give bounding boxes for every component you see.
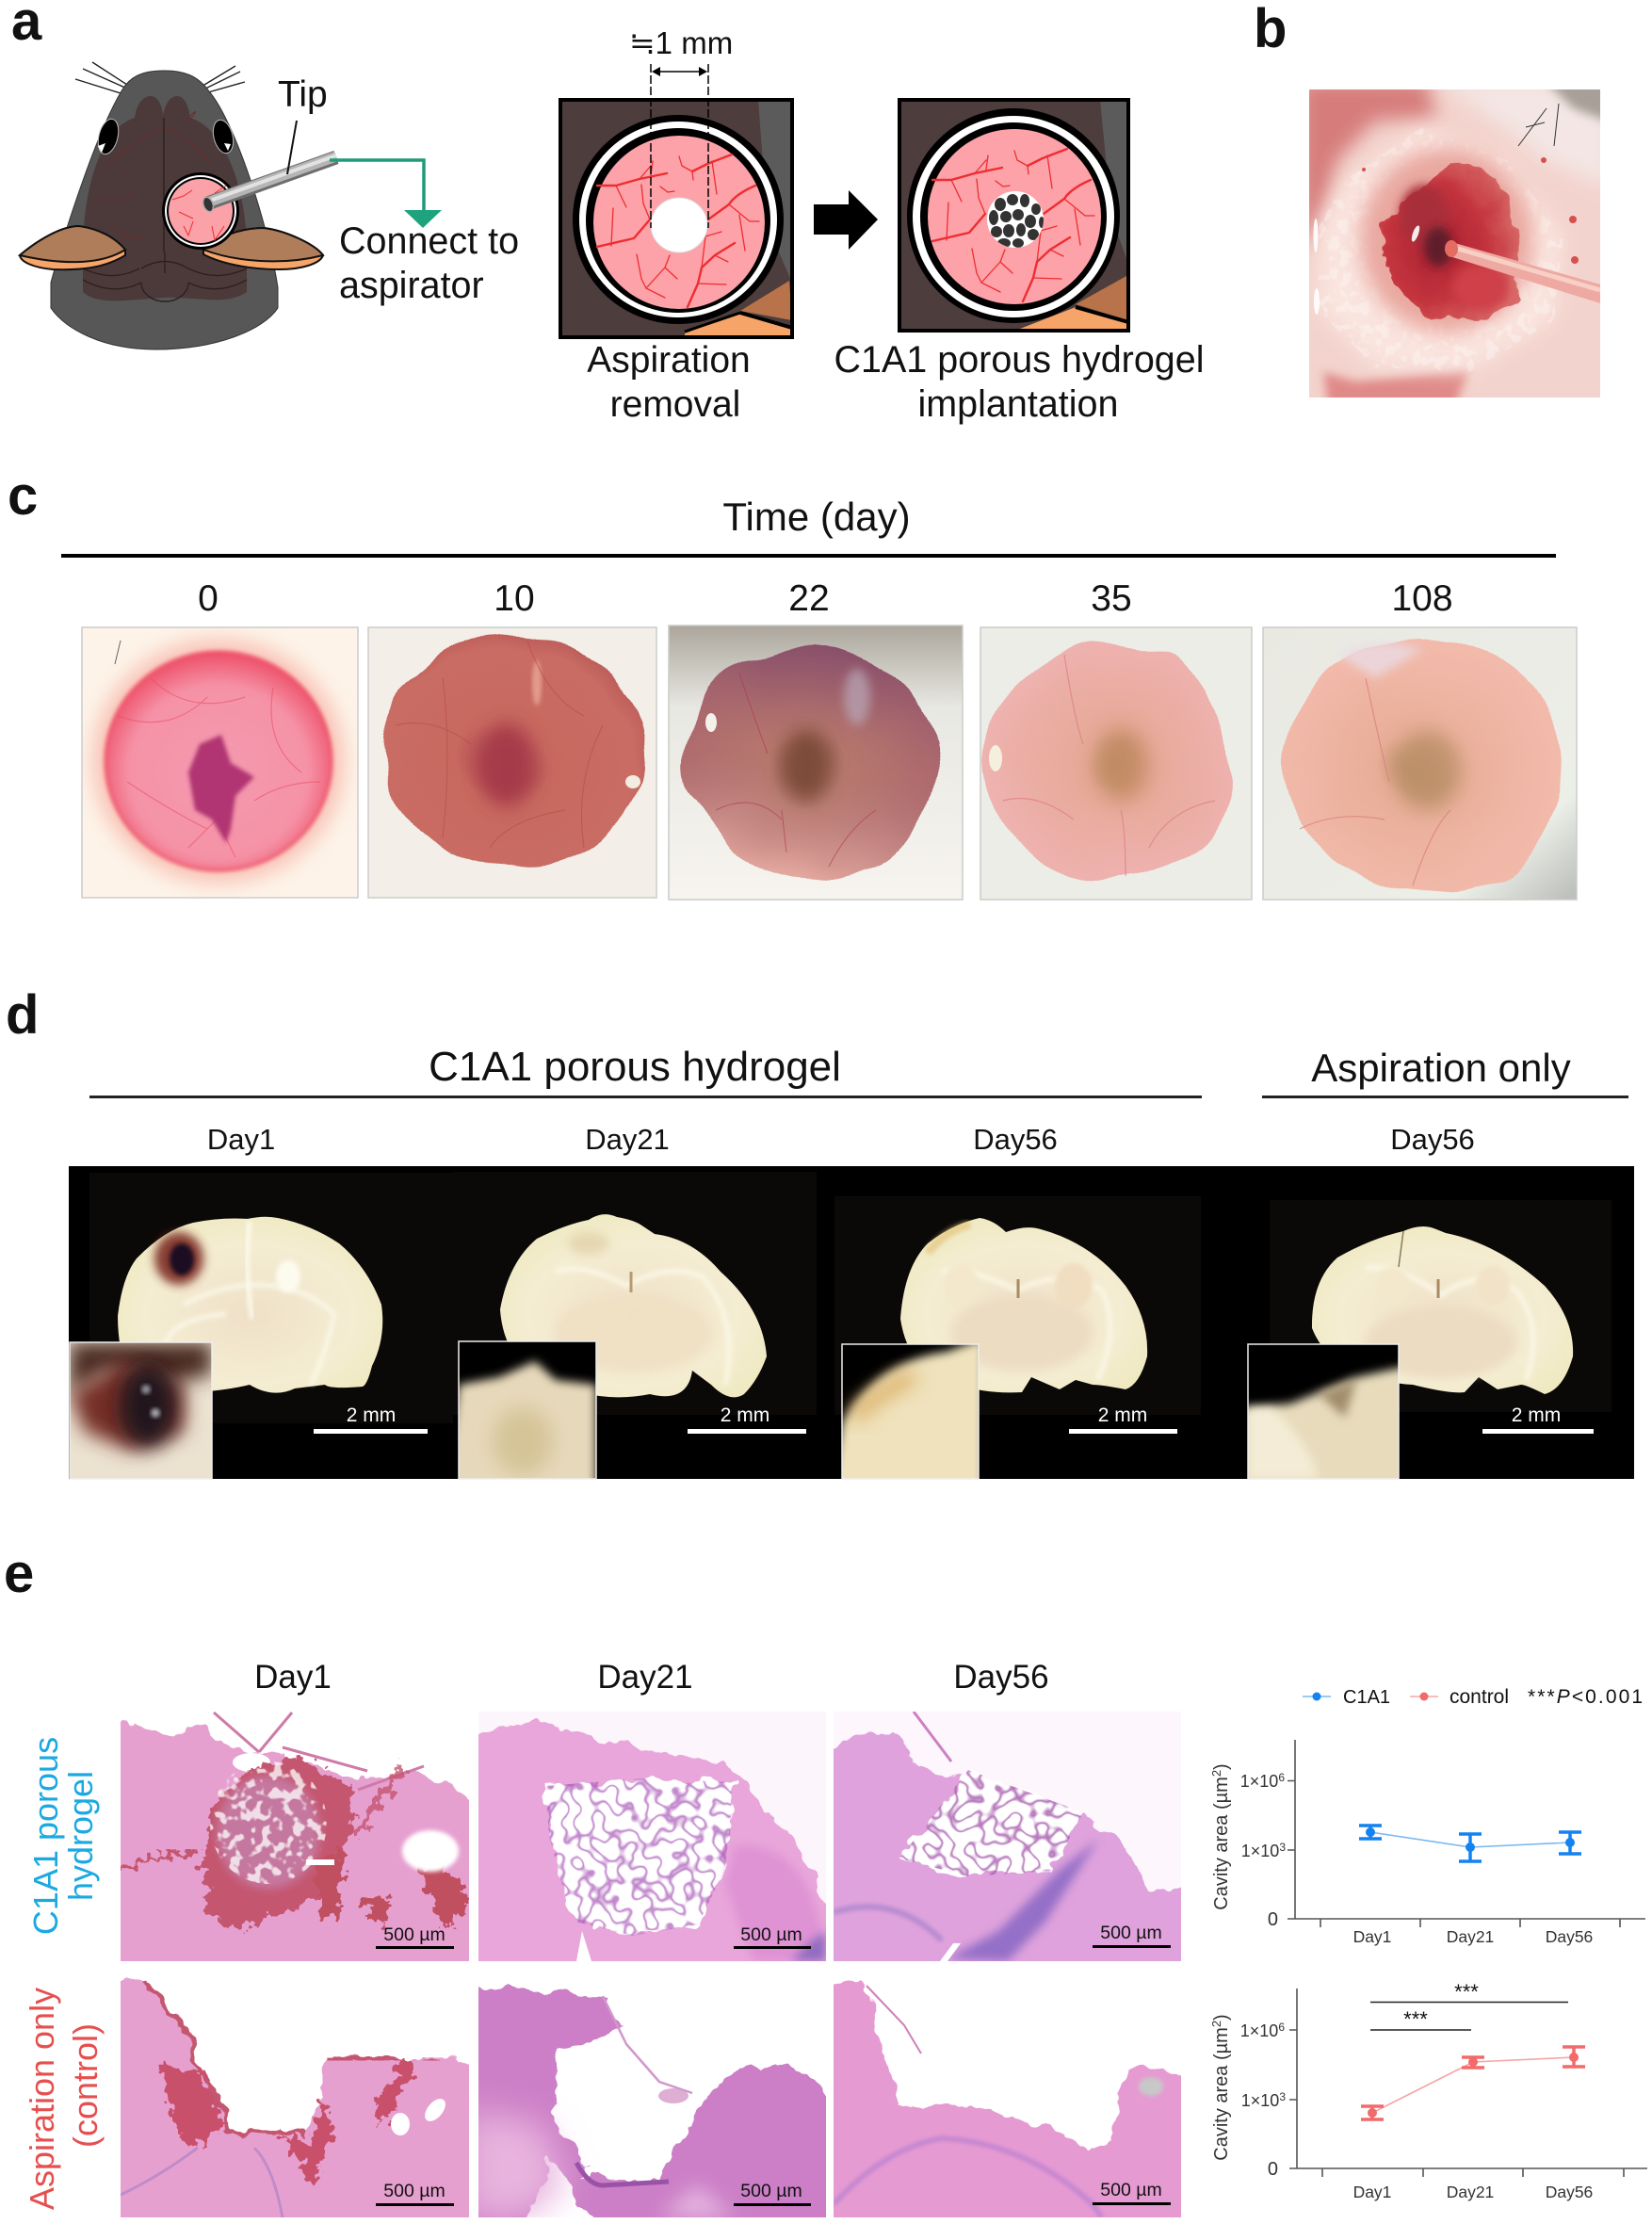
significance brackets: *** (1454, 1980, 1479, 2004)
tick labels: 6 (1278, 1771, 1285, 1784)
label: Tip with leader: Tip (278, 74, 328, 115)
label: connect to aspirator: aspirator (339, 265, 484, 306)
dimension marker: about 1 mm (629, 25, 733, 228)
histology scale bars: 500 µm: 500 µm (1100, 1923, 1162, 1943)
legend: control (1450, 1686, 1509, 1708)
scale bars: 2 mm: 2 mm (1512, 1404, 1561, 1426)
panel label d: d (6, 984, 39, 1046)
label: hydrogel implantation: implantation (917, 383, 1119, 425)
histology: hydrogel day 1 (121, 1712, 469, 1961)
histology scale bars: 500 µm (376, 1923, 1171, 2206)
panel b: surgical photograph (1254, 0, 1611, 405)
significance brackets (1370, 1980, 1568, 2031)
data series: control (1361, 2047, 1585, 2119)
label: connect to aspirator: Connect to (339, 220, 519, 262)
ears (20, 226, 125, 269)
timepoint labels: Day21 (585, 1123, 670, 1156)
chart: C1A1 cavity area: Day1 (1353, 1927, 1391, 1946)
tick labels: 0 (1268, 2159, 1278, 2180)
legend (1303, 1686, 1643, 1708)
axis title: 2 (1209, 1770, 1223, 1777)
tick labels: 1×10 (1240, 1772, 1278, 1791)
label: aspiration removal: Aspiration (587, 340, 751, 381)
scale bars: 2 mm: 2 mm (1098, 1404, 1147, 1426)
porous hydrogel implant (987, 191, 1045, 248)
inset: day 56 (841, 1343, 980, 1480)
histology scale bars: 500 µm: 500 µm (740, 1924, 802, 1945)
photo: brain day 56 (900, 1218, 1147, 1392)
day labels: 108 (1391, 578, 1453, 619)
tick labels: 6 (1278, 2021, 1285, 2034)
histology scale bars: 500 µm: 500 µm (740, 2181, 802, 2201)
arrow: connection to aspirator (330, 160, 442, 228)
axes (1289, 1989, 1647, 2177)
tick labels (1240, 1771, 1286, 1930)
label: Tip with leader (278, 74, 328, 174)
heading rule (1262, 1096, 1628, 1098)
day labels (198, 578, 1453, 619)
timeline rule (61, 554, 1556, 558)
row label: aspiration only (control): (control) (66, 2023, 105, 2148)
arrow: block arrow to implantation (814, 190, 878, 250)
day labels: 0 (198, 578, 219, 619)
panel a: surgical schematic (11, 0, 1205, 425)
axis title: 2 (1209, 2021, 1223, 2027)
tick labels: 1×10 (1241, 2091, 1279, 2110)
scale bars: 2 mm: 2 mm (721, 1404, 769, 1426)
histology: hydrogel day 21 (478, 1712, 826, 1961)
day labels: 35 (1091, 578, 1132, 619)
scale bars: 2 mm: 2 mm (347, 1404, 396, 1426)
panel e: histology and cavity area charts (4, 1543, 1647, 2224)
histology scale bars: 500 µm: 500 µm (383, 1924, 445, 1945)
tick labels: 0 (1268, 1909, 1278, 1930)
cranial window (162, 172, 239, 250)
histology: control day 1 (121, 1978, 469, 2217)
histology: control day 56 (834, 1980, 1181, 2217)
histology: hydrogel day 56 (834, 1712, 1181, 1961)
photo: brain aspiration only (1312, 1226, 1573, 1394)
timepoint labels: Day56 (973, 1123, 1058, 1156)
photo: brain day 21 (500, 1214, 767, 1397)
column headings: Day56 (953, 1659, 1049, 1696)
tick labels: 3 (1279, 2090, 1286, 2103)
tick labels: 1×10 (1241, 1842, 1279, 1860)
histology scale bars: 500 µm: 500 µm (383, 2181, 445, 2201)
row label: C1A1 porous hydrogel (26, 1737, 100, 1935)
chart: control cavity area: Day56 (1546, 2183, 1593, 2201)
photo: aspiration through cranial window (1309, 89, 1600, 398)
chart: control cavity area: Day1 (1353, 2183, 1391, 2201)
heading: C1A1 porous hydrogel: C1A1 porous hydrogel (429, 1044, 841, 1090)
diagram: hydrogel implantation window (899, 100, 1128, 331)
day labels: 10 (494, 578, 535, 619)
panel d: whole brain sections (6, 984, 1634, 1498)
photo: day 35 (966, 623, 1252, 900)
significance brackets: *** (1403, 2007, 1428, 2031)
row label: C1A1 porous hydrogel: C1A1 porous (26, 1737, 65, 1935)
dimension marker: about 1 mm: ≒1 mm (629, 25, 733, 60)
data series: C1A1 (1359, 1826, 1581, 1861)
axis title: ) (1211, 2014, 1232, 2021)
eyes (95, 117, 236, 156)
heading: aspiration only: Aspiration only (1311, 1046, 1571, 1090)
chart: C1A1 cavity area: Day56 (1546, 1927, 1593, 1946)
black photo strip (69, 1166, 1634, 1479)
panel label e: e (4, 1543, 34, 1604)
chart: control cavity area: Day21 (1447, 2183, 1494, 2201)
day labels: 22 (788, 578, 830, 619)
row label: aspiration only (control) (23, 1988, 105, 2210)
diagram: aspiration removal window (560, 100, 792, 337)
axis title: ) (1211, 1763, 1232, 1770)
row label: C1A1 porous hydrogel: hydrogel (61, 1771, 100, 1901)
chart: C1A1 cavity area: Day21 (1447, 1927, 1494, 1946)
scale bars: 2 mm (314, 1404, 1594, 1434)
tick labels: 1×10 (1240, 2021, 1278, 2040)
photo: day 22 (668, 625, 963, 900)
axis title: Cavity area (µm (1211, 2027, 1232, 2161)
heading rule (89, 1096, 1202, 1098)
timepoint labels: Day1 (207, 1123, 275, 1156)
photo: day 108 (1264, 627, 1577, 899)
chart: C1A1 cavity area (1209, 1740, 1645, 1946)
legend: C1A1 (1343, 1687, 1390, 1708)
tick labels (1240, 2021, 1286, 2180)
label: aspiration removal: removal (610, 384, 740, 425)
histology: control day 21 (478, 1984, 826, 2217)
legend: ***P<0.001 (1528, 1686, 1643, 1708)
histology scale bars: 500 µm: 500 µm (1100, 2180, 1162, 2200)
chart: control cavity area (1209, 1980, 1647, 2201)
photo: day 10 (366, 619, 660, 898)
illustration: mouse head with cranial window (20, 62, 323, 349)
row label: aspiration only (control): Aspiration only (23, 1988, 61, 2210)
aspiration tip tube (202, 155, 336, 213)
inset: day 1 lesion (70, 1342, 212, 1479)
panel c: time course photographs (8, 465, 1581, 915)
panel label c: c (8, 465, 38, 527)
inset: day 21 (458, 1340, 597, 1480)
axis title: Cavity area (µm (1211, 1777, 1232, 1910)
column headings: Day21 (597, 1659, 693, 1696)
column headings: Day1 (254, 1659, 332, 1696)
axis title: time (day): Time (day) (722, 495, 911, 539)
photo: day 0 (82, 627, 358, 898)
timepoint labels (207, 1123, 1475, 1156)
tick labels: 3 (1279, 1841, 1286, 1854)
inset: aspiration only (1247, 1343, 1400, 1480)
photo: brain day 1 (118, 1217, 382, 1394)
column headings (254, 1659, 1049, 1696)
timepoint labels: Day56 (1390, 1123, 1475, 1156)
axes (1288, 1740, 1645, 1927)
label: hydrogel implantation: C1A1 porous hydrogel (834, 339, 1205, 381)
